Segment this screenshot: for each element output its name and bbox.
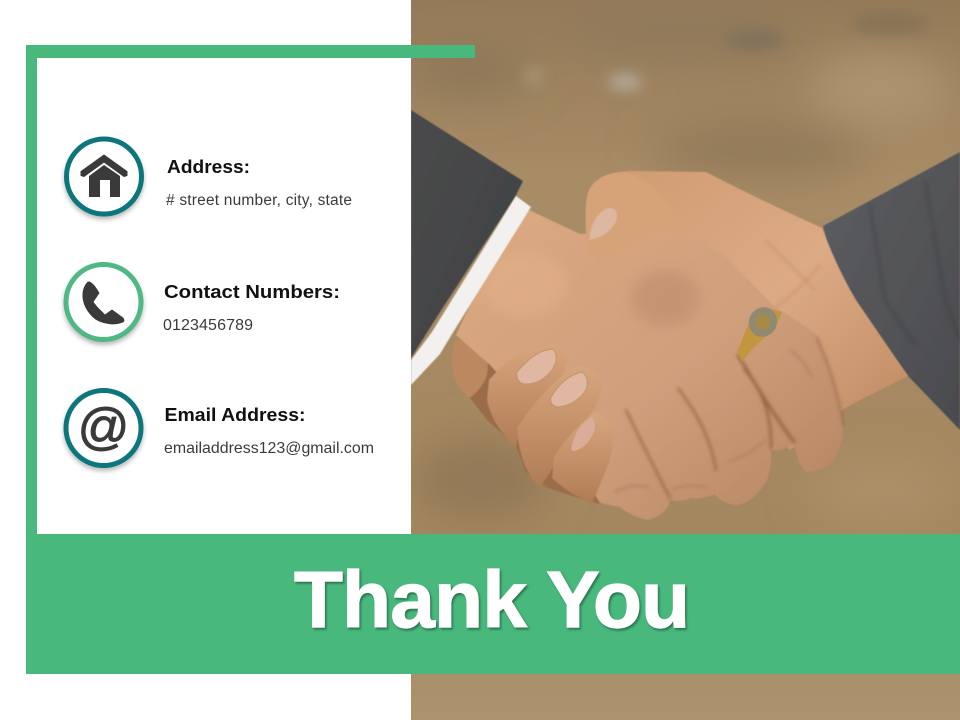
green frame: left bar (26, 45, 37, 535)
heading: address: Address: (167, 156, 250, 177)
heading: contact numbers: Contact Numbers: (164, 281, 340, 302)
icon: at sign in teal ring: @ (78, 398, 129, 455)
nail A (517, 349, 556, 384)
icon: phone in green ring (66, 264, 141, 340)
contact item: address (66, 139, 352, 214)
title: Thank You (294, 555, 690, 644)
icon: at sign in teal ring (66, 390, 141, 466)
sleeve folds (960, 334, 961, 340)
text: email value: emailaddress123@gmail.com (164, 440, 374, 457)
back of hand flush (633, 272, 696, 324)
wrapping finger B (518, 372, 598, 486)
panel: white contact background (0, 0, 411, 720)
photo: handshake over blurred ground (410, 0, 960, 720)
wrapping finger C (552, 412, 613, 503)
main hand with fingers (456, 210, 843, 520)
nail C (571, 417, 595, 451)
text: phone value: 0123456789 (163, 317, 253, 334)
back hand (600, 171, 908, 450)
shadow behind wrapped fingers (470, 363, 601, 504)
icon: house in teal ring (66, 139, 142, 214)
left jacket sleeve (411, 110, 523, 358)
thumb nail (589, 208, 617, 240)
gold ring (737, 302, 782, 362)
thumb (585, 178, 630, 240)
heading: email address: Email Address: (164, 404, 306, 425)
green frame: top bar (26, 45, 475, 58)
finger creases (626, 338, 843, 498)
nail B (551, 372, 587, 407)
photo background: blurred earth (410, 0, 960, 720)
white shirt cuff (411, 196, 531, 385)
bottom green banner (26, 534, 960, 674)
contact item: email (66, 390, 374, 466)
text: address value: # street number, city, state (166, 192, 352, 209)
wrist light patch (483, 253, 567, 317)
contact item: phone (66, 264, 340, 340)
right sweater sleeve (823, 152, 960, 430)
knuckle wrinkles (615, 350, 812, 492)
wrapping finger A (487, 342, 567, 448)
little finger of left-side hand (452, 340, 488, 398)
